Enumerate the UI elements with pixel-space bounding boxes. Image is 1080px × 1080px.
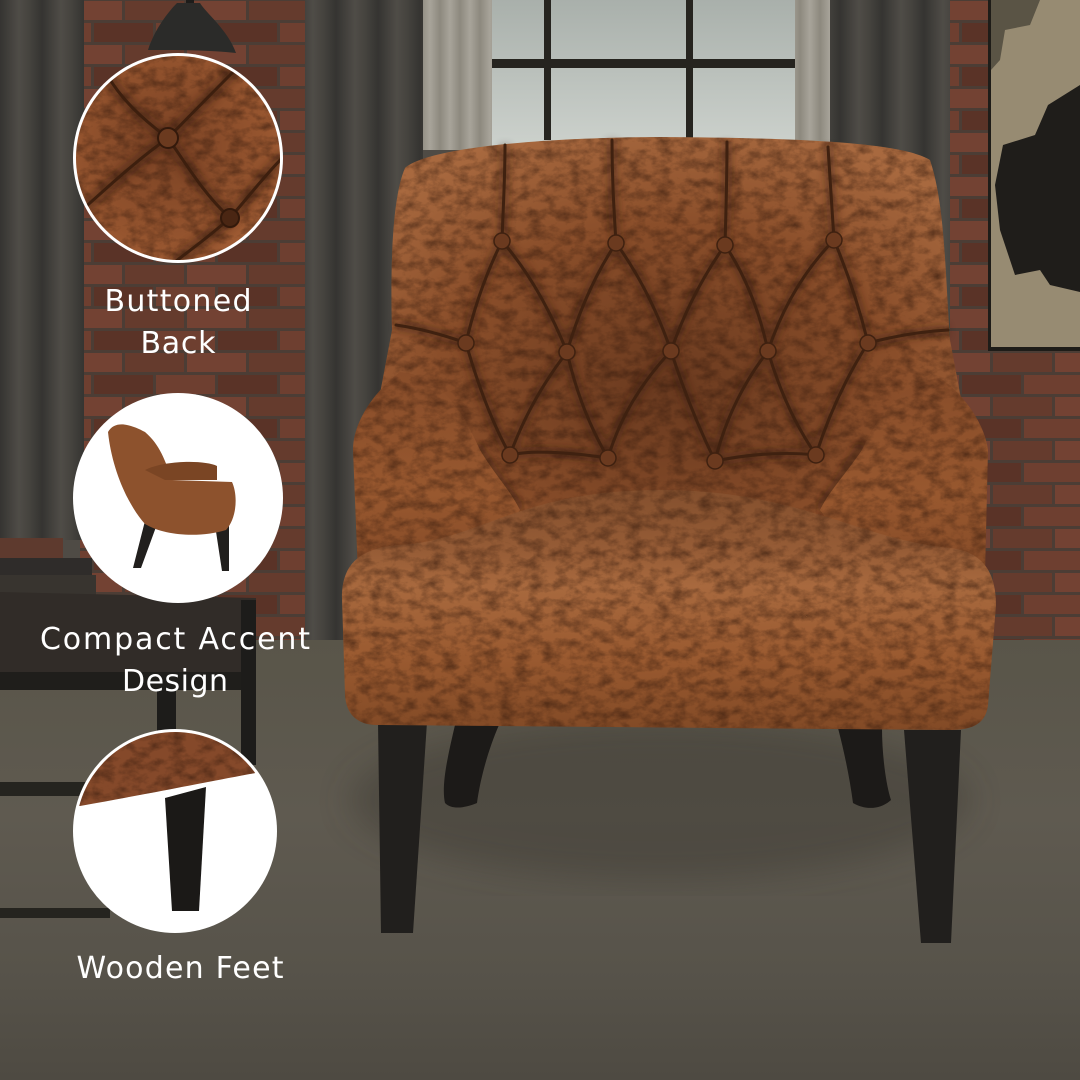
label: compact accent design: Design [122, 664, 228, 699]
label: buttoned back: Back [140, 326, 216, 361]
tufting seams [396, 140, 948, 461]
label: wooden feet: Wooden Feet [76, 951, 284, 986]
label: buttoned back [104, 284, 252, 361]
brick wall [80, 0, 1080, 640]
feature 1: buttoned back [70, 50, 286, 361]
side table with books [0, 538, 256, 918]
tufting buttons [458, 232, 876, 469]
pendant lamp [148, 0, 236, 53]
tufting seam shading [396, 140, 948, 461]
floor shadow beneath chair [350, 720, 970, 880]
curtains [0, 0, 950, 640]
seat [342, 490, 996, 730]
label: compact accent design [40, 622, 310, 699]
floor [0, 640, 1080, 1080]
circle: tufted leather close-up [70, 50, 286, 266]
feature 3: wooden feet [70, 725, 285, 986]
wall art [988, 0, 1080, 351]
chair back [370, 137, 965, 560]
feature 2: compact accent design [40, 393, 310, 699]
left arm [353, 372, 520, 575]
label: compact accent design: Compact Accent [40, 622, 310, 657]
circle: leg close-up [70, 725, 285, 933]
front legs [378, 722, 961, 943]
back legs [444, 725, 891, 808]
label: buttoned back: Buttoned [104, 284, 252, 319]
circle: chair side view [73, 393, 283, 603]
right arm [820, 378, 988, 575]
armchair [342, 137, 996, 943]
window [420, 0, 840, 150]
